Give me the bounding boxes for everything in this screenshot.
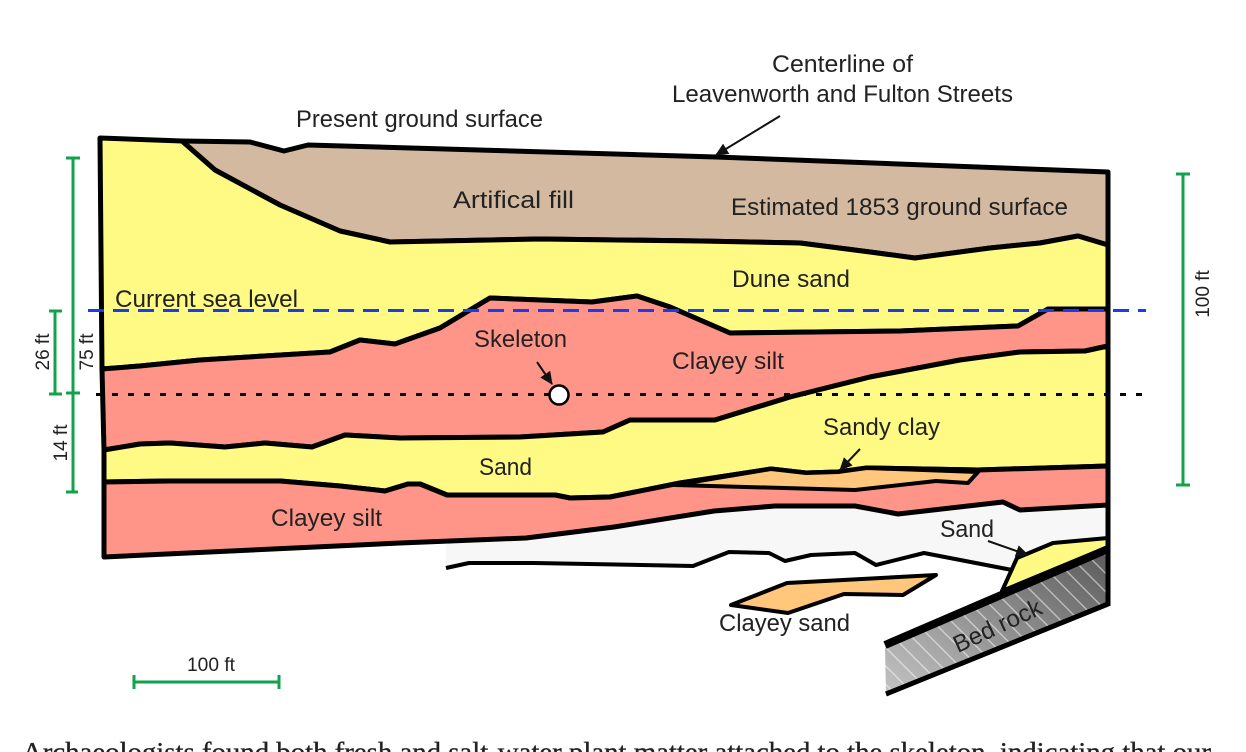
- arrow: sand: [988, 541, 1028, 555]
- right edge line: [1106, 172, 1110, 606]
- label: centerline: Centerline of: [772, 51, 913, 78]
- layer: white sand: [446, 502, 1106, 570]
- label: bed rock: Bed rock: [949, 594, 1047, 659]
- layer: middle sand: [104, 346, 1108, 498]
- label: current sea level: Current sea level: [115, 286, 298, 313]
- skeleton depth line: [96, 393, 1148, 396]
- layer: lower clayey silt: [104, 466, 1108, 557]
- label: 26 ft: 26 ft: [33, 333, 54, 370]
- label: upper clayey silt: Clayey silt: [672, 348, 784, 375]
- label: skeleton: Skeleton: [474, 326, 567, 353]
- label: sandy clay: Sandy clay: [823, 414, 940, 441]
- layer: artificial fill: [182, 141, 1108, 258]
- scale: left depth bars: [49, 158, 80, 492]
- arrow: skeleton: [537, 362, 552, 384]
- layer: bed rock: [885, 545, 1108, 696]
- label: 14 ft: 14 ft: [51, 424, 72, 461]
- skeleton marker: [550, 386, 568, 404]
- layer: upper clayey silt: [102, 296, 1108, 450]
- label: 100 ft scale: 100 ft: [187, 655, 236, 676]
- layer: sand wedge above bed rock: [1002, 538, 1108, 591]
- layer: sandy clay lens: [675, 468, 978, 490]
- label: streets: Leavenworth and Fulton Streets: [672, 81, 1013, 108]
- label: lower clayey silt: Clayey silt: [271, 505, 382, 532]
- scale: right depth bar: [1176, 174, 1190, 485]
- scale: horizontal bar: [134, 675, 279, 689]
- label: 100 ft depth: 100 ft: [1193, 270, 1214, 318]
- label: present ground surface: Present ground surface: [296, 106, 543, 133]
- arrow: centerline: [716, 116, 780, 155]
- label: artifical fill: Artifical fill: [453, 187, 574, 214]
- label: dune sand: Dune sand: [732, 266, 850, 293]
- label: 75 ft: 75 ft: [77, 333, 98, 370]
- arrow: sandy clay: [840, 449, 860, 470]
- sea level line: [88, 309, 1146, 312]
- layer: clayey sand lens: [731, 575, 936, 613]
- label: middle sand: Sand: [479, 454, 532, 481]
- label: clayey sand: Clayey sand: [719, 610, 850, 637]
- label: estimated surface: Estimated 1853 ground surface: [731, 194, 1068, 221]
- layer: dune sand: [100, 138, 1108, 369]
- label: lower sand: Sand: [940, 516, 994, 543]
